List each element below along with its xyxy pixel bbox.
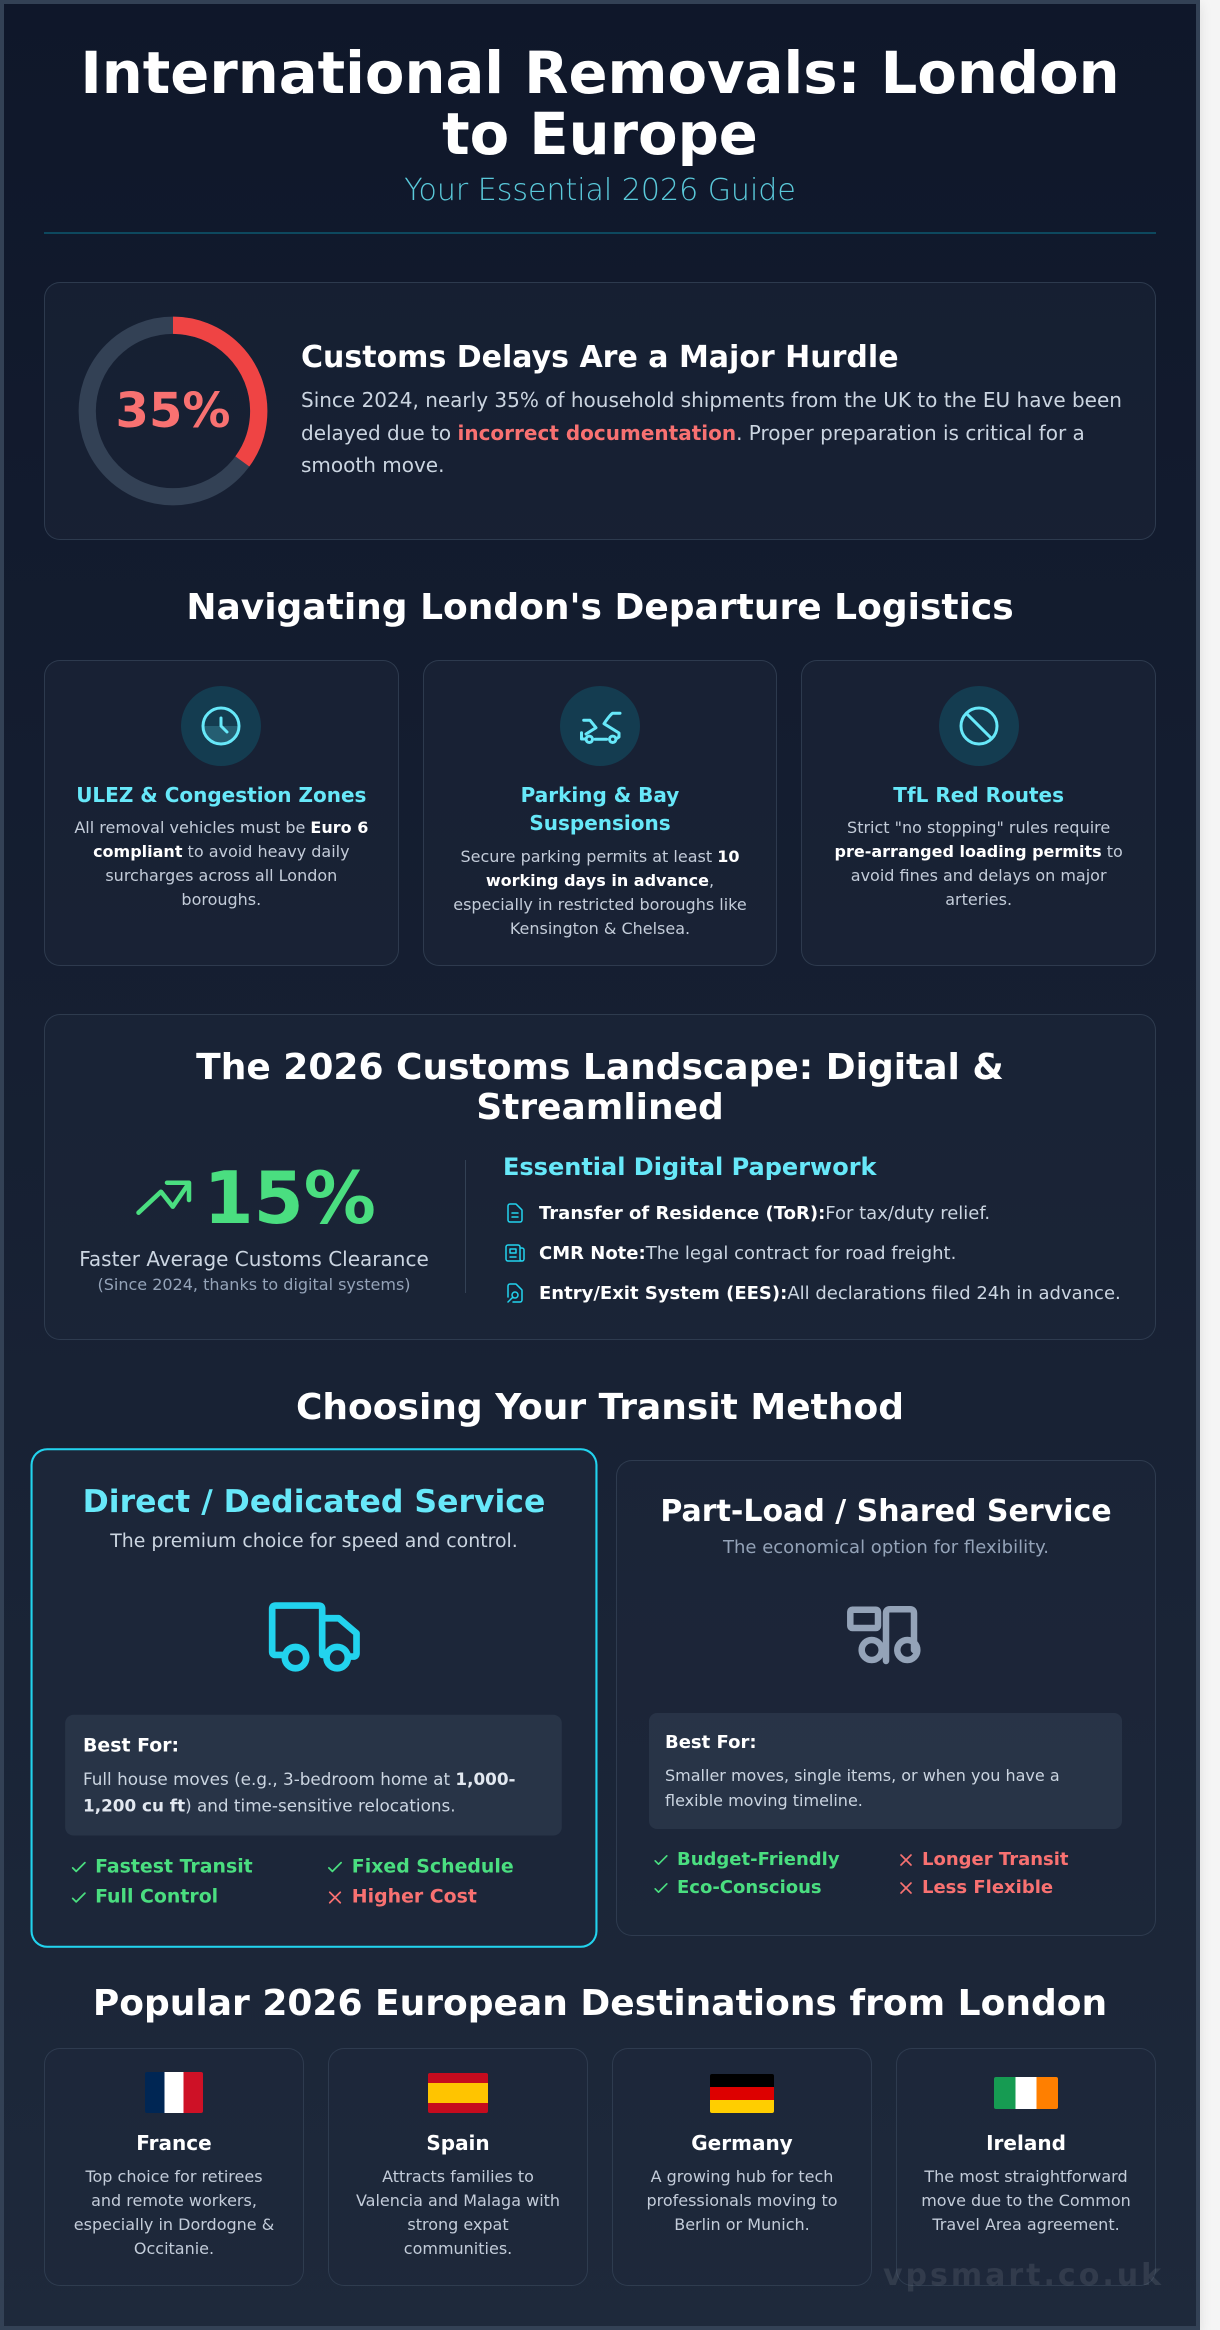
heading: customs landscape: The 2026 Customs Landscape: Digital & — [196, 1046, 1004, 1088]
stat label: Faster Average Customs Clearance — [79, 1247, 429, 1271]
panel: direct service — [30, 1448, 598, 1948]
title: to Europe — [442, 100, 758, 168]
donut chart: 35% — [78, 316, 268, 506]
text: France: Occitanie. — [134, 2239, 214, 2258]
panel: red routes — [801, 660, 1156, 966]
text: customs delays: Since 2024, nearly 35% of household shipments from the UK to the EU have been — [301, 388, 1122, 412]
text: parking: especially in restricted boroughs like — [453, 895, 747, 914]
text: France — [74, 2167, 274, 2258]
heading: destinations: Popular 2026 European Destinations from London — [93, 1983, 1107, 2024]
pro: fastest transit: Fastest Transit — [95, 1856, 253, 1878]
text: Ireland: Travel Area agreement. — [932, 2215, 1120, 2234]
text: Germany — [646, 2167, 838, 2234]
heading: Germany: Germany — [691, 2131, 793, 2155]
text: ULEZ: surcharges across all London — [105, 866, 337, 885]
pro: budget-friendly: Budget-Friendly — [677, 1848, 840, 1870]
stat: 15%: 15% — [204, 1156, 376, 1240]
text: Spain: Attracts families to — [382, 2167, 534, 2186]
text: customs delays: delayed due to incorrect documentation. Proper preparation is critical for a — [301, 420, 1085, 444]
text: ULEZ: compliant to avoid heavy daily — [93, 842, 350, 861]
box: best for part-load — [649, 1713, 1122, 1829]
list item: CMR: CMR Note:The legal contract for road freight. — [539, 1242, 956, 1264]
text: Germany: A growing hub for tech — [651, 2167, 833, 2186]
label: best for: Best For: — [665, 1732, 757, 1753]
pro: fixed schedule: Fixed Schedule — [352, 1856, 514, 1878]
subtitle: Your Essential 2026 Guide — [404, 172, 796, 208]
panel: Spain — [328, 2048, 588, 2286]
flag: Ireland — [994, 2077, 1058, 2109]
icon: truck — [268, 1602, 360, 1672]
text: Germany: professionals moving to — [646, 2191, 838, 2210]
icon: shared load — [847, 1606, 921, 1664]
text: best for direct: Full house moves (e.g., 3-bedroom home at 1,000- — [83, 1769, 516, 1789]
text: Spain — [356, 2167, 560, 2258]
title: International Removals: London — [80, 40, 1120, 107]
flag: France — [145, 2072, 203, 2113]
title — [80, 40, 1120, 168]
icon: clock — [181, 686, 261, 766]
text: Spain: Valencia and Malaga with — [356, 2191, 560, 2210]
heading: customs landscape — [196, 1046, 1004, 1128]
pro: eco-conscious: Eco-Conscious — [677, 1877, 822, 1898]
heading: red routes: TfL Red Routes — [893, 783, 1064, 807]
heading: ULEZ: ULEZ & Congestion Zones — [76, 783, 366, 807]
text: red routes: Strict "no stopping" rules require — [847, 818, 1110, 837]
icon: newspaper — [505, 1244, 525, 1262]
panel: Germany — [612, 2048, 872, 2286]
text: Ireland: The most straightforward — [924, 2167, 1128, 2186]
text: parking: Kensington & Chelsea. — [510, 919, 690, 938]
con: higher cost: Higher Cost — [352, 1886, 477, 1908]
panel: customs delays — [44, 282, 1156, 540]
watermark: vpsmart.co.uk — [883, 2258, 1164, 2293]
text: parking — [453, 847, 747, 938]
flag: Spain — [428, 2073, 488, 2113]
list item: ToR: Transfer of Residence (ToR):For tax/duty relief. — [539, 1202, 990, 1224]
text: ULEZ: boroughs. — [181, 890, 261, 909]
panel: ULEZ — [44, 660, 399, 966]
icon: document — [507, 1203, 523, 1223]
heading: parking — [521, 783, 679, 835]
subheading: direct: The premium choice for speed and control. — [110, 1530, 518, 1552]
text: Germany: Berlin or Munich. — [674, 2215, 810, 2234]
text: France: especially in Dordogne & — [74, 2215, 274, 2234]
text: Ireland: move due to the Common — [921, 2191, 1131, 2210]
heading: parking: Parking & Bay — [521, 783, 679, 807]
text: best for part-load: Smaller moves, single items, or when you have a — [665, 1766, 1060, 1785]
text: best for direct — [83, 1769, 516, 1815]
heading: Ireland: Ireland — [986, 2131, 1066, 2155]
text: customs delays: smooth move. — [301, 453, 444, 477]
text: red routes: arteries. — [945, 890, 1012, 909]
box: best for direct — [65, 1715, 562, 1836]
panel: part-load service — [616, 1460, 1156, 1936]
text: ULEZ — [74, 818, 368, 909]
panel: Ireland — [896, 2048, 1156, 2286]
label: best for: Best For: — [83, 1735, 179, 1757]
stat note: (Since 2024, thanks to digital systems) — [97, 1275, 411, 1294]
text: red routes: avoid fines and delays on major — [851, 866, 1107, 885]
text: Spain: communities. — [404, 2239, 512, 2258]
text: red routes — [835, 818, 1123, 909]
heading: parking: Suspensions — [529, 811, 671, 835]
con: longer transit: Longer Transit — [922, 1848, 1069, 1870]
con: less flexible: Less Flexible — [922, 1877, 1053, 1898]
text: France: and remote workers, — [91, 2191, 257, 2210]
panel: parking — [423, 660, 777, 966]
icon: parking — [560, 686, 640, 766]
icon: trending up — [136, 1180, 192, 1215]
flag: Germany — [710, 2074, 774, 2113]
heading: customs delays: Customs Delays Are a Major Hurdle — [301, 340, 899, 374]
text: red routes: pre-arranged loading permits to — [835, 842, 1123, 861]
text: parking: Secure parking permits at least 10 — [460, 847, 739, 866]
list item: EES: Entry/Exit System (EES):All declarations filed 24h in advance. — [539, 1282, 1121, 1304]
heading: France: France — [136, 2131, 212, 2155]
heading: part-load: Part-Load / Shared Service — [660, 1494, 1112, 1528]
subheading: part-load: The economical option for flexibility. — [723, 1537, 1049, 1558]
heading: transit method: Choosing Your Transit Method — [296, 1387, 904, 1428]
icon: no stopping — [939, 686, 1019, 766]
heading: digital paperwork: Essential Digital Paperwork — [503, 1153, 876, 1181]
text: best for part-load — [665, 1766, 1060, 1810]
donut chart: 35%: 35% — [116, 383, 230, 439]
text: best for direct: 1,200 cu ft) and time-sensitive relocations. — [83, 1795, 456, 1815]
panel: customs landscape — [44, 1014, 1156, 1340]
icon: document search — [507, 1283, 523, 1303]
text: France: Top choice for retirees — [85, 2167, 263, 2186]
text: Ireland — [921, 2167, 1131, 2234]
pro: full control: Full Control — [95, 1886, 218, 1908]
text: ULEZ: All removal vehicles must be Euro 6 — [74, 818, 368, 837]
text: customs delays — [301, 388, 1122, 477]
heading: customs landscape: Streamlined — [476, 1086, 724, 1128]
heading: Spain: Spain — [426, 2131, 490, 2155]
text: best for part-load: flexible moving timeline. — [665, 1790, 863, 1810]
heading: departure logistics: Navigating London's Departure Logistics — [186, 586, 1014, 628]
text: Spain: strong expat — [407, 2215, 509, 2234]
heading: direct: Direct / Dedicated Service — [83, 1484, 545, 1521]
panel: France — [44, 2048, 304, 2286]
text: parking: working days in advance, — [486, 871, 714, 890]
